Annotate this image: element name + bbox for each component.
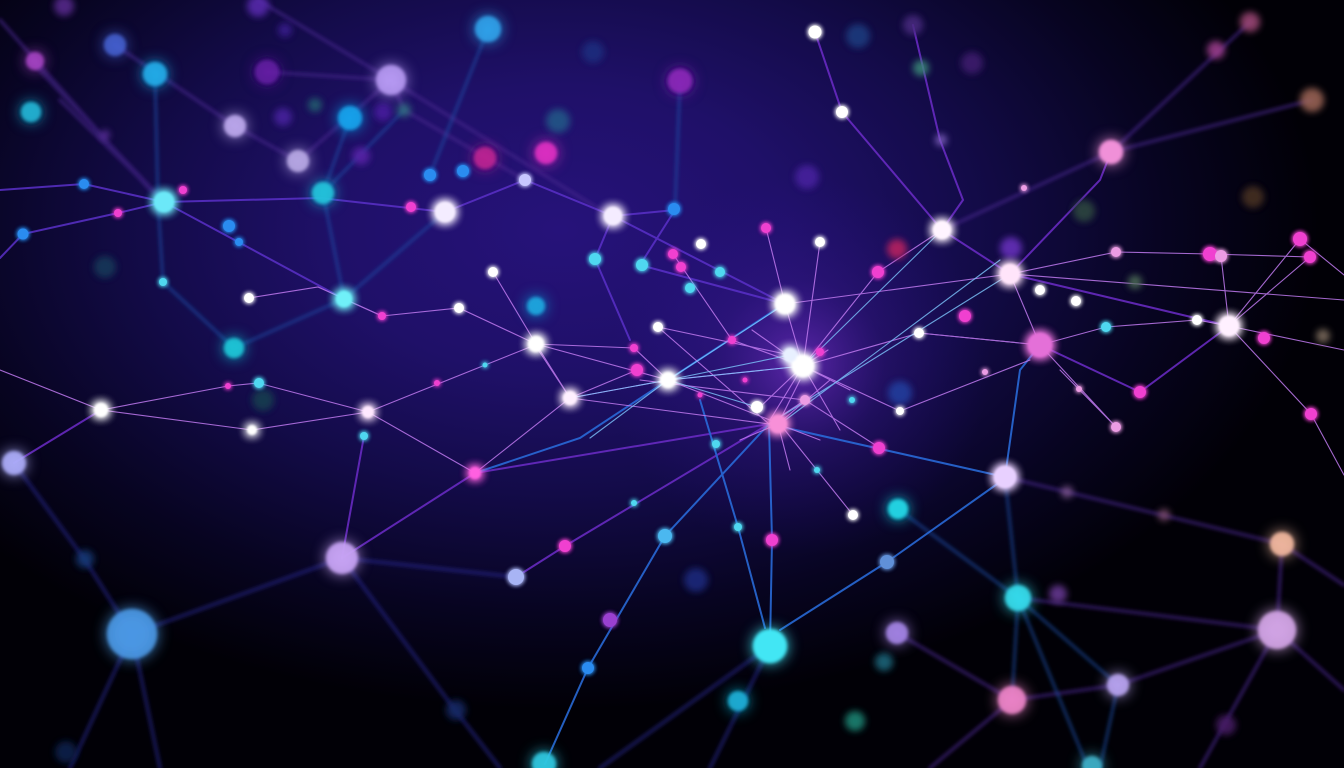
fine bright links	[0, 228, 1344, 515]
bright glowing nodes	[94, 192, 1239, 488]
